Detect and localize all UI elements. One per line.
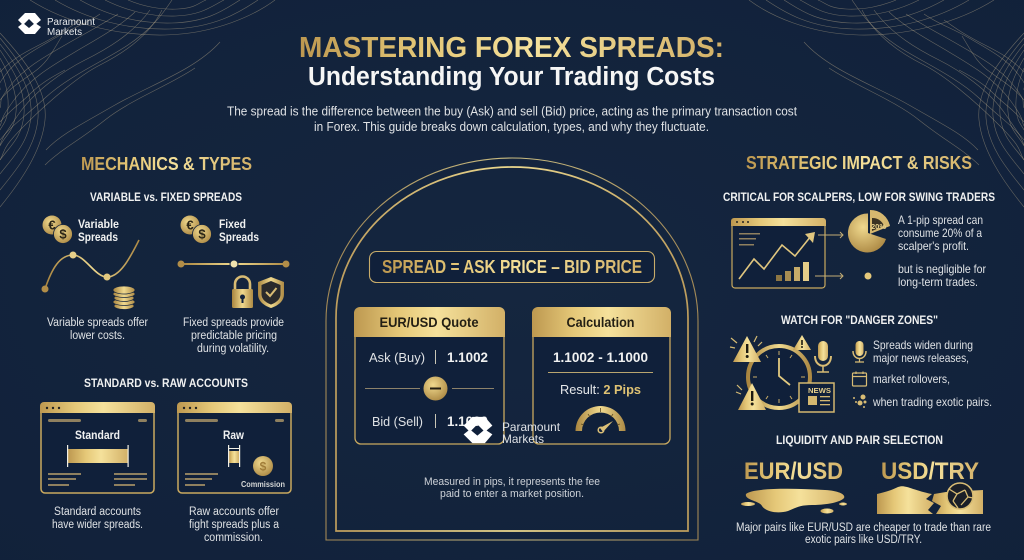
logo: Paramount Markets watermark bbox=[464, 417, 561, 446]
text: rollovers: market rollovers, bbox=[873, 372, 950, 386]
panel: raw account window: $ bbox=[260, 460, 267, 474]
text: long-term trades: but is negligible for bbox=[898, 262, 986, 276]
caption: major vs exotic: Major pairs like EUR/USD are cheaper to trade than rare bbox=[736, 522, 991, 534]
caption: raw account: Raw accounts offer bbox=[189, 506, 279, 518]
intro text: The spread is the difference between the buy (Ask) and sell (Bid) price, acting as the primary transaction cost bbox=[227, 104, 797, 118]
icon: variable spreads coins: € bbox=[48, 218, 56, 232]
caption: standard account: Standard accounts bbox=[54, 506, 141, 518]
text: news releases: Spreads widen during bbox=[873, 338, 973, 352]
text: news releases: major news releases, bbox=[873, 351, 969, 365]
card: calculation: Result: 2 Pips bbox=[560, 382, 641, 397]
chart: 20 percent pie: 20% bbox=[871, 224, 887, 231]
panel: raw account window: Raw bbox=[223, 428, 245, 442]
logo: Paramount Markets top-left: Paramount bbox=[47, 17, 95, 28]
caption: raw account: fight spreads plus a bbox=[189, 519, 280, 531]
title: Understanding Your Trading Costs bbox=[308, 63, 715, 91]
arrow: to dot bbox=[815, 273, 843, 279]
caption: fixed spreads: Fixed spreads provide bbox=[183, 317, 284, 329]
panel: standard account window bbox=[40, 402, 155, 493]
panel: mechanics and types bbox=[40, 154, 292, 544]
text: scalper profit: consume 20% of a bbox=[898, 226, 982, 240]
chart: trading window bbox=[731, 218, 826, 288]
card: EUR/USD quote: 1.1000 bbox=[447, 414, 488, 429]
text: scalper profit: scalper's profit. bbox=[898, 239, 969, 253]
card: EUR/USD quote: EUR/USD Quote bbox=[380, 314, 479, 330]
label: variable spreads: Spreads bbox=[78, 232, 118, 244]
intro text: in Forex. This guide breaks down calculation, types, and why they fluctuate. bbox=[314, 120, 709, 134]
caption: variable spreads: Variable spreads offer bbox=[47, 317, 148, 329]
card: EUR/USD quote: Ask (Buy) bbox=[369, 350, 425, 365]
text: scalper profit: A 1-pip spread can bbox=[898, 213, 983, 227]
label: fixed spreads: Spreads bbox=[219, 232, 259, 244]
caption: variable spreads: lower costs. bbox=[70, 330, 125, 342]
chart: fixed spread line bbox=[178, 260, 290, 268]
caption: fixed spreads: during volatility. bbox=[197, 343, 269, 355]
heading: mechanics and types: MECHANICS & TYPES bbox=[81, 154, 252, 174]
card: EUR/USD quote: 1.1002 bbox=[447, 350, 488, 365]
card: calculation: 1.1002 - 1.1000 bbox=[553, 350, 648, 365]
panel: raw account window bbox=[177, 402, 292, 493]
icon: coin stack bbox=[113, 286, 135, 310]
icon: variable spreads coins: $ bbox=[59, 226, 67, 242]
formula box bbox=[370, 252, 654, 282]
logo: Paramount Markets top-left: Markets bbox=[47, 27, 82, 38]
caption: major vs exotic: exotic pairs like USD/TRY. bbox=[805, 534, 922, 546]
panel: raw account window: Commission bbox=[241, 480, 285, 489]
icon: fixed spreads coins bbox=[180, 216, 212, 244]
arch frame bbox=[326, 158, 698, 540]
logo: Paramount Markets watermark: Paramount bbox=[502, 420, 561, 434]
icon: danger zones clock cluster bbox=[730, 335, 834, 412]
icon: gauge bbox=[576, 406, 626, 433]
subheading: variable vs fixed: VARIABLE vs. FIXED SPREADS bbox=[90, 190, 242, 204]
caption: raw account: commission. bbox=[204, 532, 263, 544]
formula box: SPREAD = ASK PRICE – BID PRICE bbox=[382, 257, 642, 277]
icon: variable spreads coins bbox=[42, 216, 72, 244]
text: long-term trades: long-term trades. bbox=[898, 275, 978, 289]
icon: padlock bbox=[232, 276, 253, 308]
caption: pips: paid to enter a market position. bbox=[440, 488, 584, 500]
chart: variable spread curve bbox=[42, 240, 139, 292]
caption: pips: Measured in pips, it represents the fee bbox=[424, 476, 600, 488]
chart: 20 percent pie bbox=[848, 210, 890, 252]
caption: fixed spreads: predictable pricing bbox=[191, 330, 277, 342]
label: USD/TRY: USD/TRY bbox=[881, 458, 979, 485]
icon: liquid puddle bbox=[741, 489, 847, 514]
icon: fixed spreads coins: $ bbox=[198, 226, 206, 242]
icon: shield check bbox=[258, 277, 284, 308]
text: exotic pairs: when trading exotic pairs. bbox=[872, 395, 992, 409]
logo: Paramount Markets top-left bbox=[18, 13, 95, 38]
logo: Paramount Markets watermark: Markets bbox=[502, 432, 544, 446]
marker: small dot bbox=[864, 272, 872, 280]
heading: strategic impact: STRATEGIC IMPACT & RISKS bbox=[746, 153, 972, 173]
card: calculation bbox=[532, 307, 671, 444]
subheading: danger zones: WATCH FOR "DANGER ZONES" bbox=[781, 313, 938, 327]
subheading: standard vs raw: STANDARD vs. RAW ACCOUNTS bbox=[84, 376, 248, 390]
subheading: liquidity: LIQUIDITY AND PAIR SELECTION bbox=[776, 433, 943, 447]
title: MASTERING FOREX SPREADS: bbox=[299, 32, 724, 64]
icon: microphone bbox=[853, 341, 866, 362]
caption: standard account: have wider spreads. bbox=[52, 519, 143, 531]
title bbox=[299, 32, 724, 91]
label: EUR/USD: EUR/USD bbox=[744, 458, 843, 485]
icon: exotic dots bbox=[853, 394, 866, 408]
panel: central arch bbox=[326, 158, 698, 540]
panel: strategic impact and risks bbox=[723, 153, 995, 546]
label: variable spreads: Variable bbox=[78, 219, 119, 231]
label: fixed spreads: Fixed bbox=[219, 219, 246, 231]
card: calculation: Calculation bbox=[566, 314, 634, 330]
card: EUR/USD quote bbox=[354, 307, 505, 444]
icon: calendar bbox=[852, 372, 866, 386]
icon: danger zones clock cluster: NEWS bbox=[808, 386, 831, 395]
intro text bbox=[227, 104, 797, 134]
icon: fixed spreads coins: € bbox=[186, 218, 194, 232]
arrow: to pie bbox=[818, 232, 843, 238]
card: EUR/USD quote: Bid (Sell) bbox=[372, 414, 423, 429]
panel: standard account window: Standard bbox=[75, 428, 120, 442]
icon: cracked desert bbox=[877, 483, 983, 514]
